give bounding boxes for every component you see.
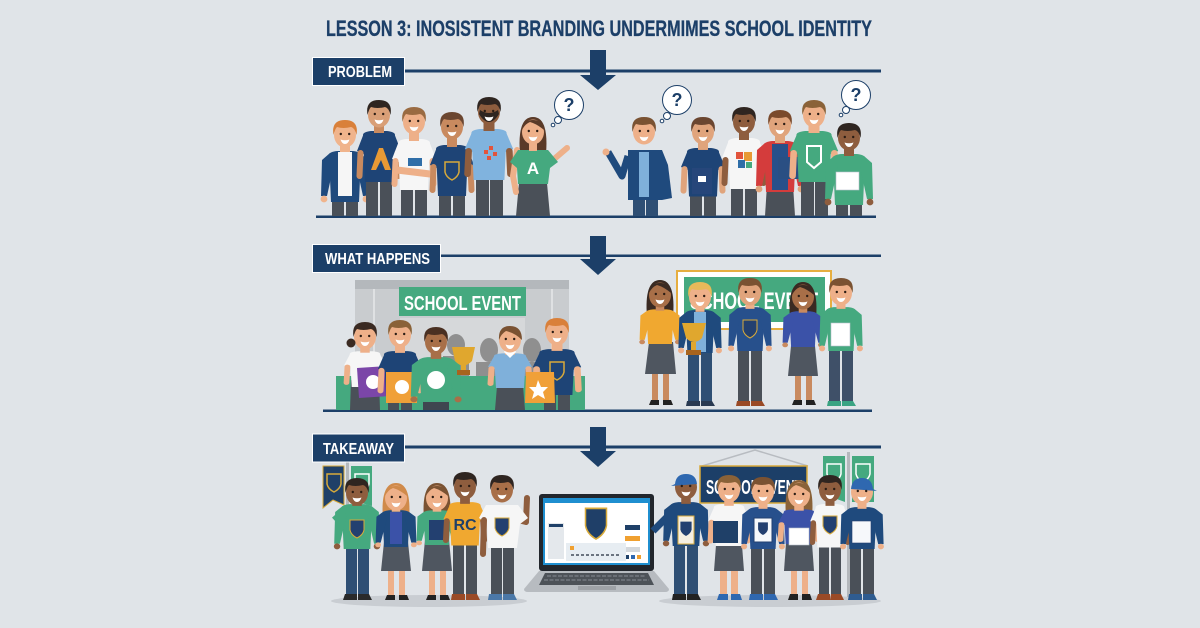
person: navy tee with clipboard	[681, 117, 725, 216]
booth table	[336, 376, 585, 410]
thought bubble: ?	[564, 95, 574, 115]
person: white tee shield	[810, 475, 850, 600]
thought bubble	[551, 90, 584, 127]
person: navy sweater with paper	[741, 477, 785, 600]
heading: takeaway: TAKEAWAY	[323, 441, 394, 458]
person: navy sweater shield	[728, 278, 772, 406]
thought bubble: ?	[672, 90, 682, 110]
title: LESSON 3: INOSISTENT BRANDING UNDERMIMES SCHOOL IDENTITY	[326, 16, 872, 41]
thought bubble	[839, 80, 870, 117]
framed event sign: SCHOOL EVENT	[690, 288, 818, 315]
person: navy sweater and cap with paper	[840, 478, 884, 600]
person: long hair green top skirt	[416, 483, 458, 600]
person: yellow top skirt	[639, 280, 681, 405]
heading: takeaway	[312, 434, 404, 462]
hanging event banner	[700, 450, 808, 503]
person: green hoodie	[334, 478, 380, 600]
heading: what happens: WHAT HAPPENS	[325, 251, 430, 268]
person: white tee arms crossed	[392, 107, 436, 216]
heading: problem	[312, 58, 404, 86]
left flags	[323, 460, 372, 596]
icon: trophy	[452, 347, 475, 375]
arrow	[580, 236, 616, 275]
ground line	[316, 216, 876, 218]
booth sign	[399, 287, 526, 316]
person: bearded light blue tee	[465, 97, 513, 216]
panel: problem	[312, 50, 881, 218]
person: glasses navy tee	[357, 100, 401, 216]
person: orange hair navy jacket skirt	[375, 483, 417, 600]
heading: problem: PROBLEM	[328, 64, 392, 81]
laptop	[524, 494, 669, 592]
person: green tee	[790, 100, 838, 216]
arrow	[580, 427, 616, 467]
section rule	[404, 446, 881, 448]
right flags	[823, 452, 874, 597]
person: long hair green tee pointing	[510, 117, 567, 216]
event booth backdrop	[355, 280, 569, 380]
person: green hoodie with paper	[825, 123, 873, 216]
heading: what happens	[312, 244, 440, 272]
person: long hair green tee pointing: A	[527, 159, 539, 178]
person: light blue shirt skirt	[488, 326, 532, 410]
arrow	[580, 50, 616, 90]
person: navy tee shield	[430, 112, 474, 216]
person: green sweater with paper	[819, 278, 863, 406]
person: navy tee star bag	[533, 318, 581, 410]
person: blonde navy jacket with trophy	[678, 282, 722, 406]
person: orange hair navy jacket	[321, 120, 369, 216]
person: navy hoodie and cap	[653, 474, 709, 600]
person: navy tee orange bag	[378, 320, 422, 410]
ground line	[323, 410, 872, 412]
section rule	[440, 254, 881, 257]
ground shadows	[331, 595, 881, 607]
person: long hair blue tee skirt	[778, 480, 820, 600]
person: blue top skirt	[782, 282, 824, 405]
person: yellow RC tee	[443, 472, 487, 600]
person: white tee colorful logo	[722, 107, 766, 216]
icon: trophy	[682, 323, 706, 355]
framed event sign	[677, 271, 831, 329]
person: white tee skirt with folder	[708, 475, 750, 600]
person: navy blazer pointing	[602, 117, 672, 216]
panel: what happens	[312, 236, 881, 412]
person: green sweater with trophy	[410, 327, 462, 410]
person: red jacket with folder	[756, 110, 804, 216]
booth sign: SCHOOL EVENT	[404, 293, 521, 315]
panel: takeaway	[312, 427, 884, 607]
orange star bag	[525, 372, 555, 403]
person: white tee raised arm	[479, 475, 528, 600]
person: white tee purple bag	[344, 322, 390, 410]
person: yellow RC tee: RC	[453, 517, 477, 534]
thought bubble	[660, 86, 692, 123]
background silhouettes	[443, 334, 544, 380]
section rule	[404, 70, 881, 72]
hanging event banner: SCHOOL EVENT	[706, 477, 802, 499]
thought bubble: ?	[850, 85, 862, 105]
